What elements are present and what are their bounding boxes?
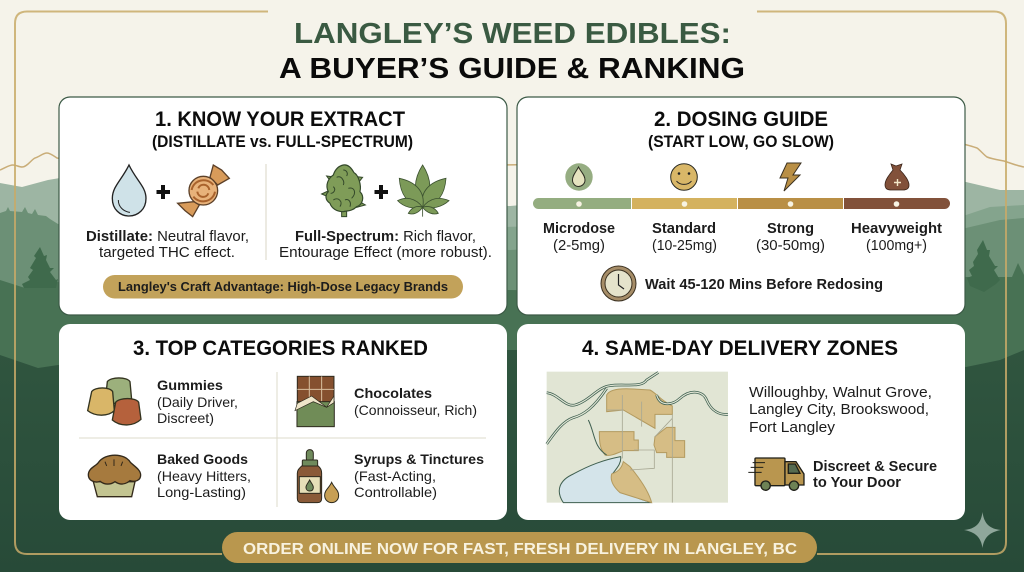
dose labels: Standard (652, 221, 716, 237)
banner: order online: ORDER ONLINE NOW FOR FAST, FRESH DELIVERY IN LANGLEY, BC (243, 541, 797, 558)
text: discreet and secure: to Your Door (813, 475, 901, 491)
heading: delivery zones: 4. SAME-DAY DELIVERY ZONES (582, 337, 898, 360)
icon: tincture bottle (297, 450, 339, 503)
text: full-spectrum description: Entourage Effect (more robust). (279, 245, 492, 261)
icon: lightning bolt (780, 163, 801, 191)
dose labels: (30-50mg) (756, 238, 825, 254)
text: full-spectrum description (279, 229, 492, 261)
text: syrups and tinctures (354, 451, 484, 500)
text: syrups and tinctures: Syrups & Tinctures (354, 451, 484, 467)
text: delivery neighbourhoods (749, 385, 932, 436)
icon: chocolate bar (295, 376, 334, 427)
text: gummies: Gummies (157, 377, 223, 393)
icon: plus (374, 185, 388, 199)
text: discreet and secure: Discreet & Secure (813, 459, 937, 475)
icon: baked pie (88, 455, 141, 497)
dose labels: (100mg+) (866, 238, 927, 254)
text: gummies (157, 377, 238, 426)
panel: know your extract (59, 97, 507, 315)
icon: microdose droplet (565, 163, 593, 191)
dose labels: (10-25mg) (652, 238, 717, 254)
text: delivery neighbourhoods: Willoughby, Walnut Grove, (749, 385, 932, 401)
text: gummies: (Daily Driver, (157, 394, 238, 410)
icon: clock (601, 266, 636, 301)
text: delivery neighbourhoods: Langley City, Brookswood, (749, 402, 929, 418)
heading: dosing guide: 2. DOSING GUIDE (654, 108, 828, 131)
icon: smiley face (671, 164, 697, 190)
text: distillate description: targeted THC effect. (99, 245, 235, 261)
panel: top categories ranked (59, 324, 507, 520)
dose labels: Strong (767, 221, 814, 237)
heading: know your extract: 1. KNOW YOUR EXTRACT (155, 108, 405, 131)
icon: cannabis leaf (398, 165, 449, 217)
icon: gummies (88, 378, 141, 425)
text: chocolates: Chocolates (354, 385, 432, 401)
text: baked goods: Baked Goods (157, 451, 248, 467)
icon: sparkle (964, 512, 1001, 548)
wait reminder: Wait 45-120 Mins Before Redosing (645, 277, 883, 293)
panel: same-day delivery zones (517, 324, 965, 520)
text: chocolates: (Connoisseur, Rich) (354, 402, 477, 418)
title: A BUYER’S GUIDE & RANKING (279, 53, 745, 85)
text: syrups and tinctures: (Fast-Acting, (354, 468, 436, 484)
divider (266, 164, 267, 260)
icon: delivery truck (748, 458, 804, 490)
icon: wrapped candy (178, 165, 229, 217)
subheading: distillate vs full-spectrum: (DISTILLATE vs. FULL-SPECTRUM) (152, 133, 413, 151)
text: chocolates (354, 385, 477, 418)
icon: money bag (885, 164, 909, 190)
text: discreet and secure (813, 459, 937, 491)
dose labels (543, 221, 942, 254)
panel: dosing guide (517, 97, 965, 315)
text: distillate description (86, 229, 249, 261)
icon: plus (156, 185, 170, 199)
title: LANGLEY’S WEED EDIBLES: (294, 18, 731, 50)
icon: water drop (112, 165, 146, 216)
text: syrups and tinctures: Controllable) (354, 484, 437, 500)
callout: craft advantage: Langley's Craft Advantage: High-Dose Legacy Brands (118, 279, 448, 294)
grid dividers (79, 372, 486, 507)
callout: craft advantage (103, 275, 463, 298)
banner: order online (222, 532, 817, 563)
icon: cannabis bud (322, 165, 365, 217)
text: distillate description: Distillate: Neutral flavor, (86, 229, 249, 245)
dose labels: Microdose (543, 221, 615, 237)
text: gummies: Discreet) (157, 410, 214, 426)
text: baked goods (157, 451, 251, 500)
heading: top categories: 3. TOP CATEGORIES RANKED (133, 337, 428, 360)
subheading: start low go slow: (START LOW, GO SLOW) (648, 133, 834, 151)
dose labels: Heavyweight (851, 221, 942, 237)
text: baked goods: (Heavy Hitters, (157, 468, 251, 484)
text: baked goods: Long-Lasting) (157, 484, 246, 500)
dose labels: (2-5mg) (553, 238, 605, 254)
map: langley delivery zones (547, 372, 728, 503)
text: full-spectrum description: Full-Spectrum: Rich flavor, (295, 229, 476, 245)
title (279, 18, 745, 85)
text: delivery neighbourhoods: Fort Langley (749, 420, 836, 436)
dose scale bar (533, 198, 950, 209)
